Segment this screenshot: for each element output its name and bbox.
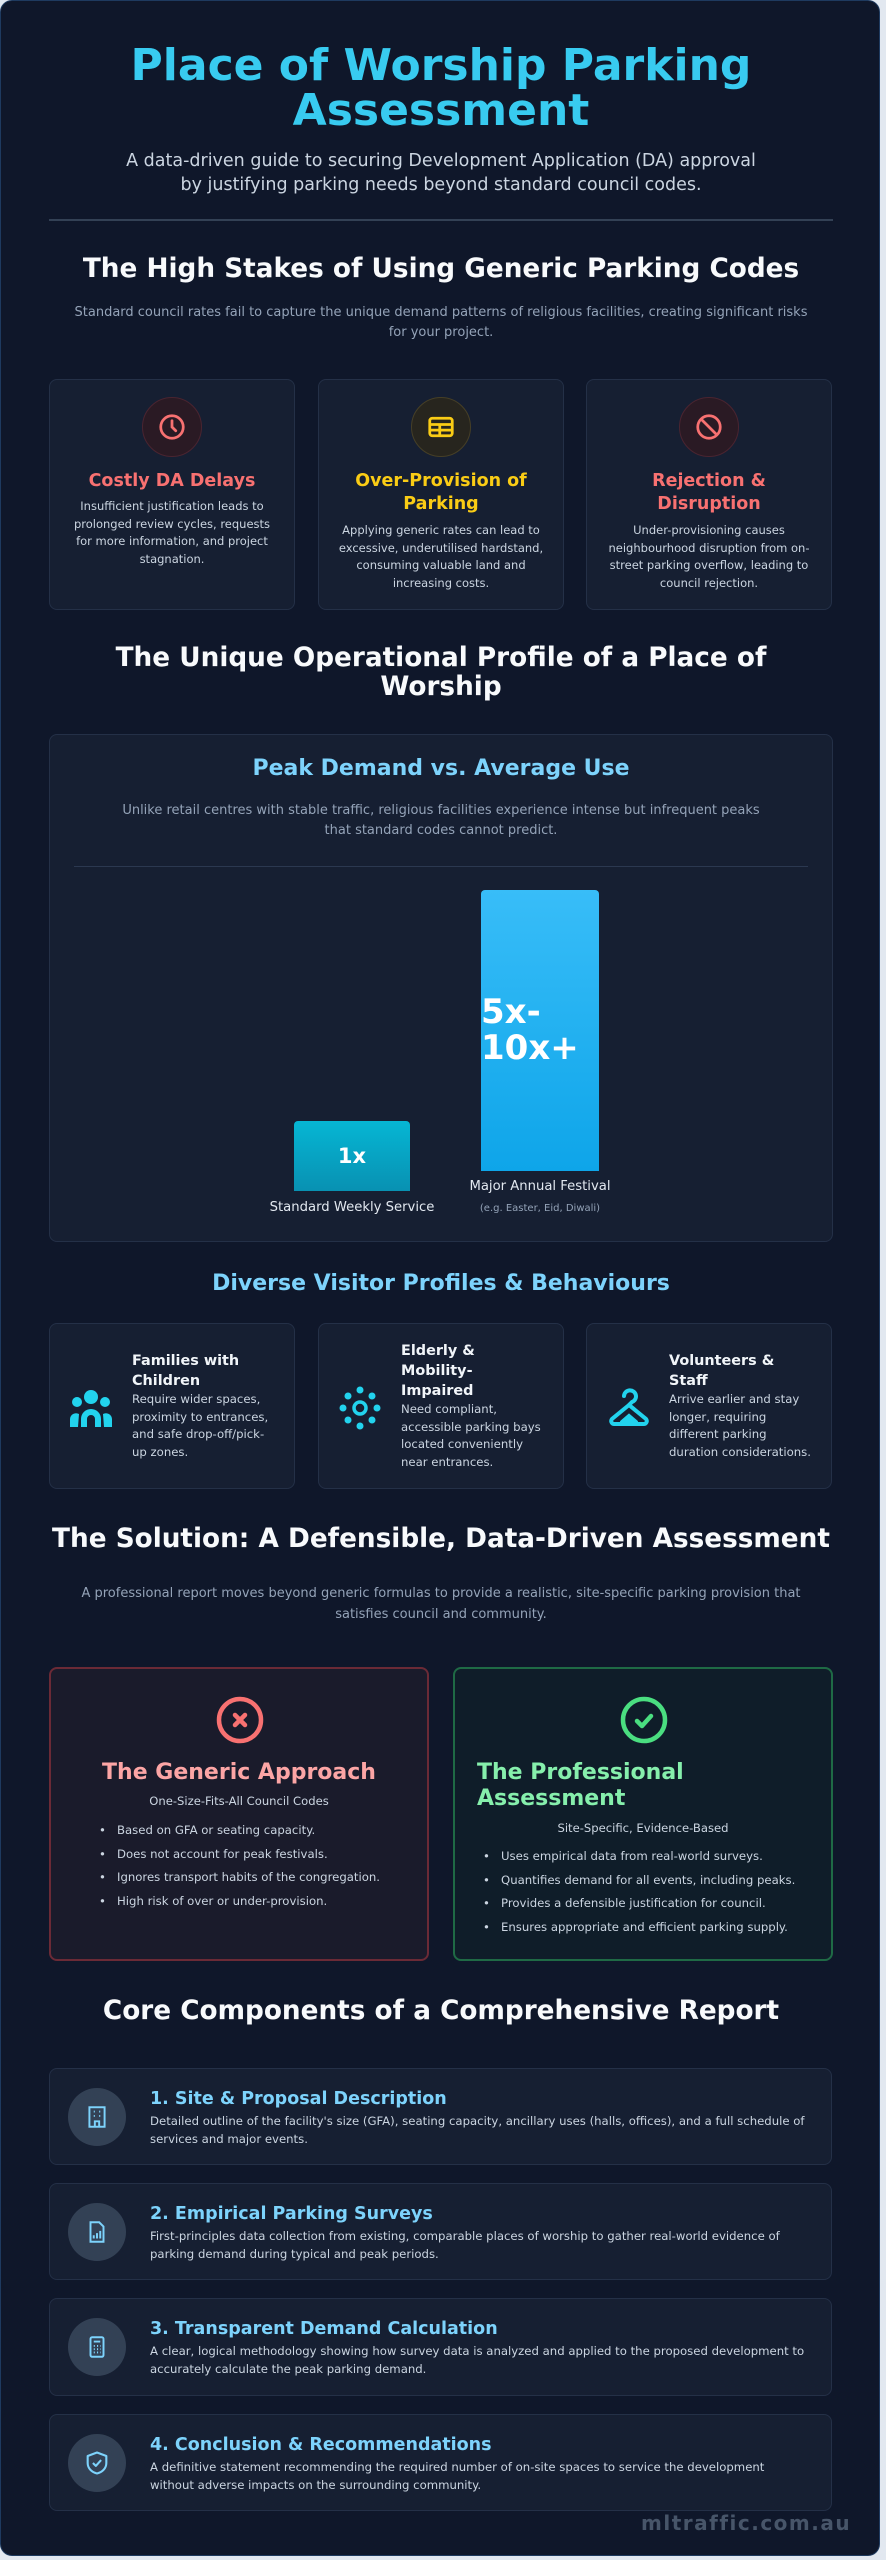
text: elderly: Impaired [401,1383,473,1399]
text: component 4: 4. Conclusion & Recommendations [150,2435,492,2455]
title: Place of Worship Parking [131,40,751,91]
bar: weekly [294,1121,410,1191]
text: elderly: Need compliant, accessible parking bays located conveniently near entrances. [401,1402,541,1469]
text: component 3: A clear, logical methodology showing how survey data is analyzed and applied to the proposed development to [150,2344,804,2358]
panel: generic approach [49,1667,429,1961]
panel: rejection [586,379,832,610]
list: generic: Ignores transport habits of the congregation. [117,1870,380,1884]
icon: people [70,1390,112,1427]
label: festival: Major Annual Festival [469,1179,611,1194]
title: generic: The Generic Approach [102,1760,376,1785]
list: generic: Based on GFA or seating capacity. [117,1823,315,1837]
text: high stakes intro: Standard council rates fail to capture the unique demand patterns of religious facilities, creating significant risks [75,305,807,320]
icon: building [68,2088,126,2146]
icon: calculator [68,2318,126,2376]
panel: costly DA delays [49,379,295,610]
text: families: Require wider spaces, proximity to entrances, and safe drop-off/pick-up zones. [132,1392,268,1459]
heading: operational profile [116,643,767,702]
panel: component 3 [49,2298,832,2396]
list: generic [100,1823,380,1908]
text: component 4 [150,2435,764,2492]
panel: families [49,1323,295,1489]
panel: peak demand chart [49,734,833,1242]
list: generic: High risk of over or under-provision. [117,1894,327,1908]
text: component 4: without adverse impacts on the surrounding community. [150,2478,481,2492]
icon: ban [679,397,739,457]
subtitle: professional: Site-Specific, Evidence-Based [557,1821,729,1835]
title [131,40,751,136]
icon: clock [142,397,202,457]
heading: solution: The Solution: A Defensible, Data-Driven Assessment [52,1524,830,1554]
card title: Parking [403,494,479,514]
text: high stakes intro [75,305,807,340]
heading: high stakes: The High Stakes of Using Generic Parking Codes [83,254,799,284]
card text: Applying generic rates can lead to excessive, underutilised hardstand, consuming valuable land and increasing costs. [339,523,543,590]
icon: x circle [216,1696,264,1744]
text: volunteers: Volunteers & [669,1353,774,1369]
text: high stakes intro: for your project. [389,325,493,340]
text: component 1 [150,2089,805,2146]
icon: check circle [620,1696,668,1744]
list: professional: Ensures appropriate and efficient parking supply. [501,1920,788,1934]
text: component 2 [150,2204,780,2260]
icon: shield check [68,2434,126,2492]
text: component 3 [150,2319,804,2376]
icon: table [411,397,471,457]
list: professional [484,1849,795,1934]
panel: volunteers [586,1323,832,1489]
panel: component 2 [49,2183,832,2280]
bar chart [270,890,611,1215]
text: families [132,1353,268,1459]
heading: operational profile: Worship [380,672,502,702]
text: component 3: accurately calculate the peak parking demand. [150,2362,426,2376]
card title: Costly DA Delays [89,471,255,491]
text: component 1: services and major events. [150,2132,308,2146]
text: families: Families with [132,1353,239,1369]
bar: festival [481,890,599,1171]
card title: Disruption [657,494,761,514]
card text: Under-provisioning causes neighbourhood disruption from on-street parking overflow, leading to council rejection. [608,523,810,590]
text: component 2: First-principles data collection from existing, comparable places of worship to gather real-world evidence of [150,2229,780,2243]
title: professional: The Professional [477,1760,684,1785]
text: volunteers: Staff [669,1373,708,1389]
panel: component 4 [49,2414,832,2511]
text: component 3: 3. Transparent Demand Calculation [150,2319,498,2339]
card title [652,471,766,514]
subtitle [126,151,756,195]
card title: Over-Provision of [355,471,527,491]
footer: brand: mltraffic.com.au [641,2511,851,2535]
list: generic: Does not account for peak festivals. [117,1846,328,1860]
heading: core components: Core Components of a Comprehensive Report [103,1996,779,2026]
icon: accessibility [340,1386,380,1430]
text: elderly: Mobility- [401,1363,473,1379]
heading: operational profile: The Unique Operational Profile of a Place of [116,643,766,673]
text: solution intro: A professional report moves beyond generic formulas to provide a realistic, site-specific parking provision that satisfies council and community. [81,1586,801,1622]
title: professional [477,1760,684,1811]
panel: elderly [318,1323,564,1489]
panel: component 1 [49,2068,832,2165]
label: festival: (e.g. Easter, Eid, Diwali) [480,1203,600,1214]
subtitle: A data-driven guide to securing Development Application (DA) approval [126,151,756,171]
chart description: Unlike retail centres with stable traffic, religious facilities experience intense but infrequent peaks that standard codes cannot predict. [122,803,760,838]
card title: Rejection & [652,471,766,491]
text: families: Children [132,1373,200,1389]
list: professional: Quantifies demand for all events, including peaks. [501,1872,795,1886]
text: component 2: parking demand during typical and peak periods. [150,2246,439,2260]
card text: Insufficient justification leads to prolonged review cycles, requests for more information, and project stagnation. [74,499,270,566]
card title [355,471,527,514]
heading: visitor profiles: Diverse Visitor Profiles & Behaviours [212,1271,670,1296]
icon: chart file [68,2203,126,2261]
label: weekly: Standard Weekly Service [270,1200,434,1215]
icon: hanger [609,1388,649,1426]
subtitle: generic: One-Size-Fits-All Council Codes [149,1794,329,1808]
text: component 1: Detailed outline of the facility's size (GFA), seating capacity, ancillary uses (halls, offices), and a full schedule of [150,2114,805,2128]
title: professional: Assessment [477,1786,625,1811]
list: professional: Uses empirical data from real-world surveys. [501,1849,763,1863]
list: professional: Provides a defensible justification for council. [501,1896,766,1910]
text: volunteers: Arrive earlier and stay longer, requiring different parking duration considerations. [669,1392,811,1459]
text: elderly [401,1343,541,1469]
label: festival [469,1179,611,1214]
panel: professional assessment [453,1667,833,1961]
text: volunteers [669,1353,811,1459]
text: component 2: 2. Empirical Parking Surveys [150,2204,433,2224]
panel: over-provision [318,379,564,610]
text: component 1: 1. Site & Proposal Description [150,2089,447,2109]
bar: festival: 5x- [481,992,541,1032]
bar: festival: 10x+ [481,1028,579,1068]
text: elderly: Elderly & [401,1343,475,1359]
subtitle: by justifying parking needs beyond standard council codes. [180,175,702,195]
text: component 4: A definitive statement recommending the required number of on-site spaces to service the development [150,2460,764,2474]
bar: weekly: 1x [338,1144,366,1168]
chart title: Peak Demand vs. Average Use [252,756,630,781]
title: Assessment [293,85,589,136]
